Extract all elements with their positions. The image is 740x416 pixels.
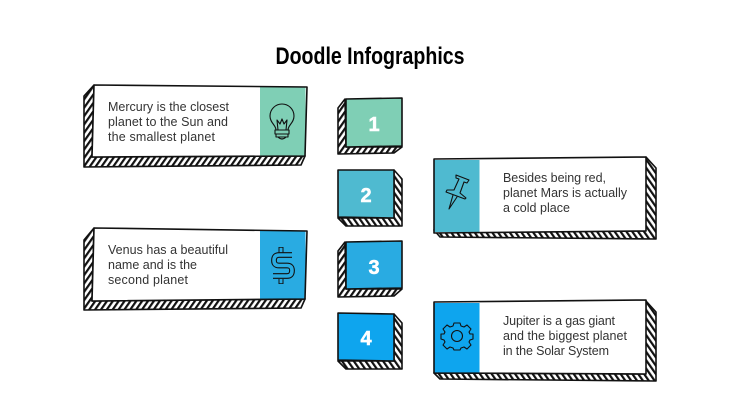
number block 3	[338, 241, 402, 297]
icon: push pin	[446, 175, 469, 209]
title: Doodle Infographics	[276, 43, 464, 70]
Mercury text: Mercury is the closest	[108, 100, 230, 114]
Mercury colour block	[260, 87, 306, 156]
Venus text: name and is the	[108, 258, 197, 272]
number block 1	[338, 98, 402, 154]
Mars text: a cold place	[503, 201, 570, 215]
number block 1: 1	[368, 114, 380, 136]
number block 4	[338, 313, 402, 369]
Jupiter text: Jupiter is a gas giant	[503, 314, 616, 328]
icon: light bulb	[270, 104, 294, 139]
Mercury text: planet to the Sun and	[108, 115, 228, 129]
icon: gear	[441, 323, 473, 350]
number block 3: 3	[368, 257, 380, 279]
Mars text: planet Mars is actually	[503, 186, 628, 200]
Jupiter colour block	[434, 303, 480, 373]
Mercury text: the smallest planet	[108, 130, 216, 144]
panel: Mercury	[84, 85, 307, 167]
Venus colour block	[260, 231, 306, 299]
Venus text: Venus has a beautiful	[108, 243, 228, 257]
panel: Venus	[84, 228, 307, 310]
Jupiter text: in the Solar System	[503, 344, 609, 358]
number block 2: 2	[360, 185, 372, 207]
panel: Jupiter	[434, 300, 656, 381]
Mars colour block	[434, 160, 480, 232]
panel: Mars	[434, 157, 656, 239]
number block 4: 4	[360, 328, 372, 350]
Mars text: Besides being red,	[503, 171, 606, 185]
Jupiter text: and the biggest planet	[503, 329, 628, 343]
number block 2	[338, 170, 402, 226]
icon: dollar sign	[273, 247, 292, 284]
Venus text: second planet	[108, 273, 189, 287]
